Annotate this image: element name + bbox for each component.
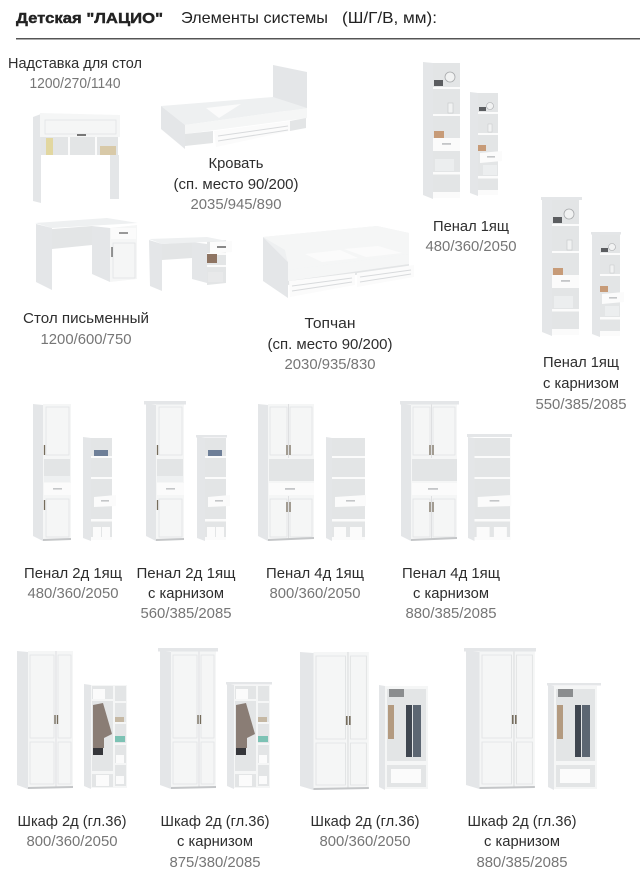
item: writing desk — [35, 218, 138, 290]
label: writing desk: Стол письменный — [23, 310, 149, 327]
item: writing desk open — [149, 237, 232, 291]
label: pencil case 1 drawer with cornice — [536, 354, 626, 413]
item: wardrobe 2 with cornice — [158, 648, 272, 789]
item: pencil case 2 doors with cornice — [144, 401, 230, 541]
label: wardrobe 2 with cornice — [160, 813, 270, 871]
label: desk hutch: Надставка для стол — [8, 55, 142, 72]
label: daybed: Топчан — [304, 315, 356, 332]
title: (Ш/Г/В, мм): — [342, 10, 437, 27]
label: pencil case 2 doors with cornice — [136, 565, 236, 622]
label: pencil case 2 doors: 480/360/2050 — [28, 585, 118, 602]
label: wardrobe 1: 800/360/2050 — [26, 833, 118, 850]
label: desk hutch — [8, 55, 142, 92]
title: Элементы системы — [181, 10, 328, 27]
label: wardrobe 4 with cornice: Шкаф 2д (гл.36) — [468, 813, 576, 830]
label: wardrobe 2 with cornice: Шкаф 2д (гл.36) — [160, 813, 270, 830]
label: wardrobe 4 with cornice: с карнизом — [484, 833, 560, 850]
label: wardrobe 3: Шкаф 2д (гл.36) — [310, 813, 420, 830]
item: pencil case 1 drawer — [423, 62, 502, 199]
label: daybed: (сп. место 90/200) — [268, 336, 392, 353]
label: wardrobe 4 with cornice — [468, 813, 576, 871]
label: pencil case 2 doors — [24, 565, 122, 602]
label: writing desk — [23, 310, 149, 348]
label: pencil case 1 drawer with cornice: 550/385/2085 — [536, 396, 626, 413]
label: wardrobe 2 with cornice: 875/380/2085 — [170, 854, 260, 871]
label: pencil case 4 doors: Пенал 4д 1ящ — [266, 565, 364, 582]
item: pencil case 1 drawer with cornice — [541, 197, 624, 337]
title — [16, 10, 437, 27]
label: desk hutch: 1200/270/1140 — [30, 75, 120, 92]
label: bed: (сп. место 90/200) — [174, 176, 298, 193]
item: wardrobe 3 — [300, 652, 428, 790]
label: bed: 2035/945/890 — [190, 196, 282, 213]
label: daybed: 2030/935/830 — [284, 356, 376, 373]
label: pencil case 1 drawer: Пенал 1ящ — [433, 218, 509, 235]
title: Детская "ЛАЦИО" — [16, 10, 163, 27]
label: pencil case 1 drawer with cornice: Пенал 1ящ — [543, 354, 619, 371]
item: daybed — [263, 226, 414, 298]
label: wardrobe 1: Шкаф 2д (гл.36) — [18, 813, 126, 830]
label: writing desk: 1200/600/750 — [40, 331, 132, 348]
label: wardrobe 4 with cornice: 880/385/2085 — [476, 854, 568, 871]
label: pencil case 4 doors: 800/360/2050 — [270, 585, 360, 602]
label: pencil case 2 doors: Пенал 2д 1ящ — [24, 565, 122, 582]
label: pencil case 4 doors with cornice — [402, 565, 500, 622]
label: wardrobe 2 with cornice: с карнизом — [177, 833, 253, 850]
label: wardrobe 3: 800/360/2050 — [320, 833, 410, 850]
label: pencil case 4 doors with cornice: 880/385/2085 — [406, 605, 496, 622]
label: wardrobe 1 — [18, 813, 126, 850]
label: pencil case 1 drawer — [426, 218, 516, 255]
item: pencil case 4 doors — [258, 404, 366, 541]
item: pencil case 4 doors with cornice — [400, 401, 512, 541]
label: wardrobe 3 — [310, 813, 420, 850]
label: bed — [174, 155, 298, 213]
item: bed — [161, 65, 307, 149]
item: wardrobe 4 with cornice — [464, 648, 601, 790]
label: daybed — [268, 315, 392, 373]
item: pencil case 2 doors — [33, 404, 116, 541]
label: pencil case 1 drawer with cornice: с карнизом — [543, 375, 619, 392]
label: pencil case 4 doors with cornice: с карнизом — [413, 585, 489, 602]
item: desk hutch — [33, 113, 120, 203]
label: pencil case 2 doors with cornice: с карнизом — [148, 585, 224, 602]
item: wardrobe 1 — [17, 651, 127, 789]
label: pencil case 2 doors with cornice: Пенал 2д 1ящ — [136, 565, 236, 582]
label: bed: Кровать — [208, 155, 264, 172]
label: pencil case 2 doors with cornice: 560/385/2085 — [140, 605, 232, 622]
label: pencil case 1 drawer: 480/360/2050 — [426, 238, 516, 255]
label: pencil case 4 doors — [266, 565, 364, 602]
label: pencil case 4 doors with cornice: Пенал 4д 1ящ — [402, 565, 500, 582]
